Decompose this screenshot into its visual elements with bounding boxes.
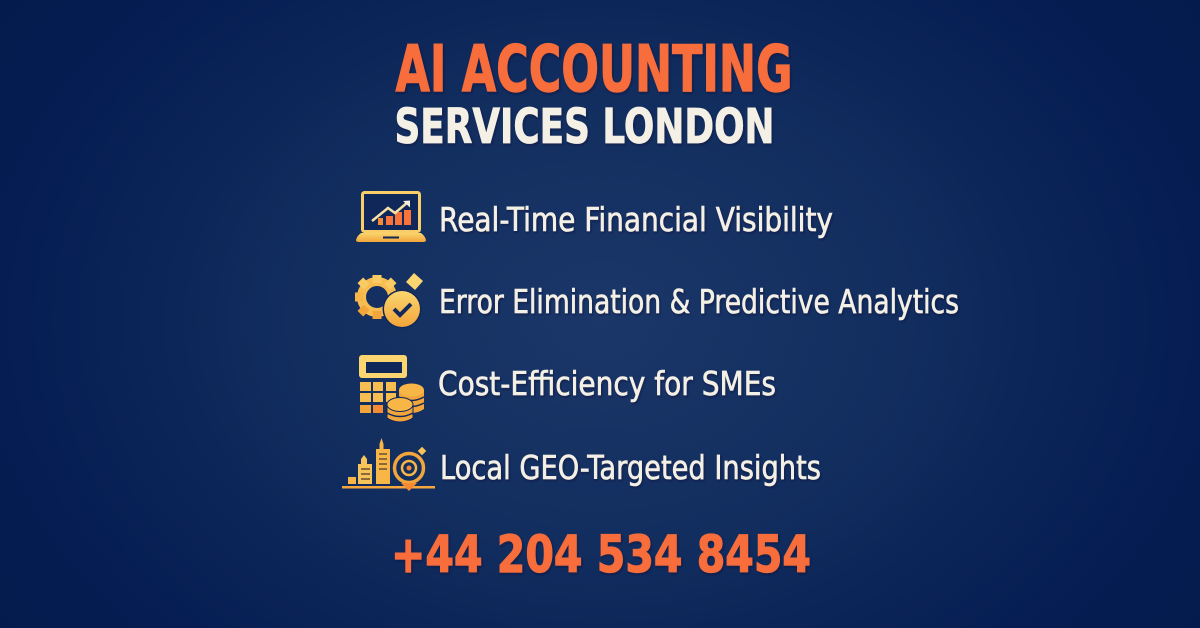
- title: [394, 32, 792, 155]
- label: real-time financial visibility: Real-Time Financial Visibility: [439, 200, 833, 239]
- icon: calculator with coins: [359, 355, 424, 422]
- title: AI ACCOUNTING: [396, 32, 792, 107]
- icon: laptop with rising chart: [356, 192, 426, 242]
- title: SERVICES LONDON: [394, 99, 774, 155]
- label: error elimination and predictive analytics: Error Elimination & Predictive Analytics: [439, 282, 959, 321]
- phone number: +44 204 534 8454: [391, 526, 811, 585]
- label: cost-efficiency for SMEs: Cost-Efficiency for SMEs: [438, 364, 776, 403]
- icon: gear with check badge: [355, 273, 423, 328]
- label: local GEO-targeted insights: Local GEO-Targeted Insights: [440, 448, 821, 487]
- icon: city skyline with location pin: [342, 438, 435, 491]
